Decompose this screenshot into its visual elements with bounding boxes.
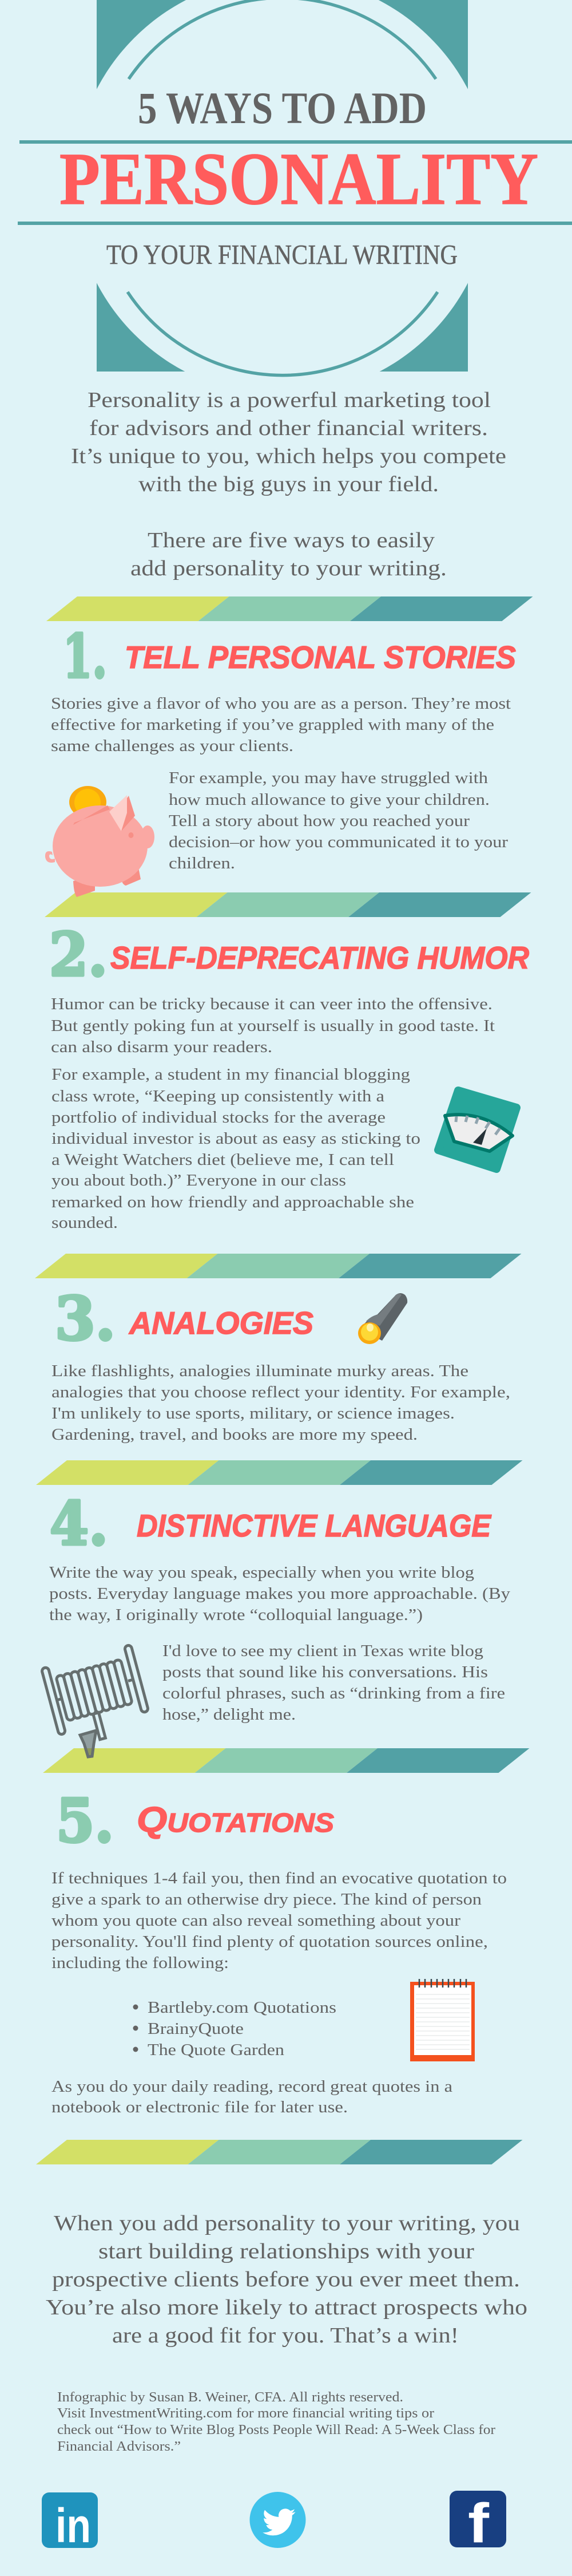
divider bar 3 (35, 1254, 522, 1278)
bullet list of quotation sources: Bartleby.com Quotations (148, 1998, 336, 2017)
icon: facebook (450, 2491, 506, 2554)
body text 3 (51, 1362, 510, 1444)
example text 4 (162, 1642, 505, 1724)
body text 3: I'm unlikely to use sports, military, or science images. (51, 1404, 455, 1423)
body text 1: same challenges as your clients. (51, 737, 293, 755)
body text 3: Gardening, travel, and books are more my speed. (51, 1425, 418, 1444)
number 3: 3. (55, 1283, 116, 1354)
icon: fire hose reel (41, 1645, 152, 1757)
number 2: 2. (49, 919, 108, 990)
intro text (71, 388, 506, 580)
credits text (57, 2390, 495, 2454)
section 4: distinctive language (49, 1488, 511, 1724)
body text 2: But gently poking fun at yourself is usually in good taste. It (51, 1017, 495, 1035)
body text 5: including the following: (51, 1954, 229, 1972)
closing note of section 5 (51, 2077, 452, 2116)
credits text: Infographic by Susan B. Weiner, CFA. All rights reserved. (57, 2390, 403, 2405)
body text 4 (49, 1563, 511, 1624)
icon: facebook: f (468, 2492, 490, 2554)
section 2: self-deprecating humor (49, 919, 529, 1232)
body text 4: the way, I originally wrote “colloquial language.”) (49, 1606, 423, 1624)
icon: flashlight (358, 1293, 407, 1344)
body text 5 (51, 1869, 507, 1972)
body text 4: posts. Everyday language makes you more approachable. (By (49, 1585, 511, 1603)
section 1: tell personal stories (51, 621, 516, 872)
title block (18, 83, 572, 270)
example text 2: sounded. (51, 1214, 118, 1232)
example text 2: class wrote, “Keeping up consistently with a (51, 1087, 384, 1105)
heading 2: SELF-DEPRECATING HUMOR (110, 940, 529, 975)
body text 2 (51, 995, 495, 1056)
heading 3: ANALOGIES (128, 1305, 313, 1341)
intro text: It’s unique to you, which helps you compete (71, 444, 506, 468)
credits text: check out “How to Write Blog Posts People Will Read: A 5-Week Class for (57, 2423, 495, 2437)
example text 1 (169, 769, 508, 872)
heading 5: QUOTATIONS (137, 1800, 334, 1840)
credits text: Financial Advisors.” (57, 2439, 181, 2454)
number 5: 5. (56, 1785, 114, 1856)
conclusion text (46, 2211, 527, 2348)
conclusion text: prospective clients before you ever meet them. (52, 2267, 520, 2291)
body text 1: effective for marketing if you’ve grappled with many of the (51, 716, 494, 734)
example text 4: hose,” delight me. (162, 1705, 296, 1724)
bullet list of quotation sources (133, 1998, 336, 2059)
example text 2: a Weight Watchers diet (believe me, I can tell (51, 1151, 394, 1169)
body text 5: personality. You'll find plenty of quotation sources online, (51, 1933, 488, 1951)
body text 3: Like flashlights, analogies illuminate murky areas. The (51, 1362, 468, 1380)
icon: linkedin (42, 2492, 98, 2553)
intro text: Personality is a powerful marketing tool (88, 388, 491, 412)
example text 4: I'd love to see my client in Texas write blog (162, 1642, 483, 1660)
body text 5: If techniques 1-4 fail you, then find an evocative quotation to (51, 1869, 507, 1887)
icon: notepad (410, 1979, 475, 2061)
example text 1: how much allowance to give your children. (169, 791, 490, 809)
icon: bathroom scale (438, 1091, 517, 1169)
divider bar 5 (43, 1748, 530, 1773)
icon: linkedin: in (55, 2499, 91, 2553)
body text 1 (51, 694, 511, 755)
body text 1: Stories give a flavor of who you are as a person. They’re most (51, 694, 511, 713)
example text 2 (51, 1065, 420, 1232)
icon: twitter (249, 2492, 305, 2548)
example text 2: portfolio of individual stocks for the average (51, 1108, 386, 1127)
title line: 5 ways to add: 5 WAYS TO ADD (138, 83, 427, 133)
bullet list of quotation sources: The Quote Garden (148, 2041, 285, 2059)
example text 1: children. (169, 854, 235, 872)
example text 4: colorful phrases, such as “drinking from a fire (162, 1684, 505, 1702)
intro text: with the big guys in your field. (138, 472, 439, 496)
icon: piggy bank with coin (45, 786, 154, 897)
body text 5: give a spark to an otherwise dry piece. The kind of person (51, 1890, 482, 1909)
heading 4: DISTINCTIVE LANGUAGE (137, 1508, 492, 1543)
intro text: add personality to your writing. (130, 556, 447, 580)
divider bar 4 (36, 1460, 523, 1485)
example text 2: individual investor is about as easy as sticking to (51, 1129, 420, 1148)
section 5: quotations (51, 1785, 507, 2116)
number 4: 4. (50, 1488, 108, 1559)
closing note of section 5: notebook or electronic file for later use. (51, 2098, 348, 2116)
example text 1: decision–or how you communicated it to your (169, 833, 508, 851)
intro text: for advisors and other financial writers. (89, 416, 488, 440)
example text 2: you about both.)” Everyone in our class (51, 1171, 346, 1190)
example text 2: remarked on how friendly and approachable she (51, 1193, 414, 1211)
example text 4: posts that sound like his conversations. His (162, 1663, 488, 1681)
divider bar 1 (46, 596, 533, 621)
example text 1: Tell a story about how you reached your (169, 812, 470, 830)
number 1: 1. (63, 621, 107, 692)
body text 4: Write the way you speak, especially when you write blog (49, 1563, 474, 1582)
body text 5: whom you quote can also reveal something about your (51, 1911, 460, 1930)
conclusion text: When you add personality to your writing, you (54, 2211, 520, 2235)
heading 1: TELL PERSONAL STORIES (125, 639, 516, 675)
bullet list of quotation sources: BrainyQuote (148, 2020, 244, 2038)
section 3: analogies (51, 1283, 510, 1444)
body text 2: Humor can be tricky because it can veer into the offensive. (51, 995, 492, 1013)
intro text: There are five ways to easily (148, 528, 435, 552)
credits text: Visit InvestmentWriting.com for more financial writing tips or (57, 2406, 434, 2421)
example text 2: For example, a student in my financial blogging (51, 1065, 410, 1084)
body text 3: analogies that you choose reflect your identity. For example, (51, 1383, 510, 1401)
divider bar 2 (45, 892, 531, 917)
example text 1: For example, you may have struggled with (169, 769, 488, 787)
conclusion text: are a good fit for you. That’s a win! (112, 2324, 459, 2348)
closing note of section 5: As you do your daily reading, record great quotes in a (51, 2077, 452, 2096)
header emblem: teal square with circular cut-out and ring (73, 0, 492, 396)
divider bar 6 (36, 2140, 523, 2164)
conclusion text: start building relationships with your (98, 2239, 474, 2263)
title line: to your financial writing: TO YOUR FINANCIAL WRITING (106, 239, 458, 270)
conclusion text: You’re also more likely to attract prospects who (46, 2296, 527, 2320)
body text 2: can also disarm your readers. (51, 1038, 272, 1056)
